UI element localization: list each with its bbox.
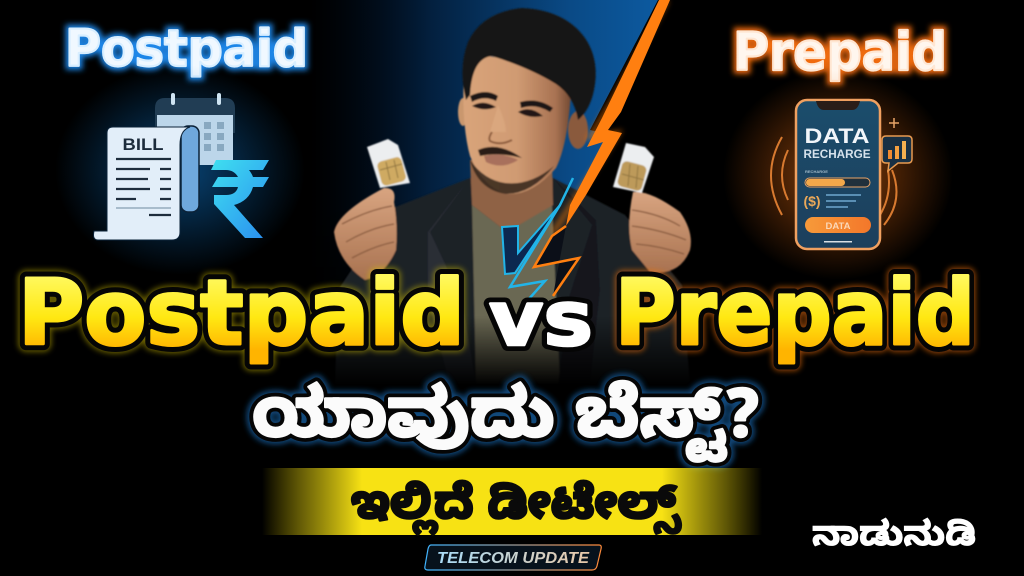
face <box>463 52 572 194</box>
Prepaid word: Prepaid <box>615 261 975 366</box>
neck <box>470 160 553 232</box>
chat bubble with bars <box>882 136 912 171</box>
band caption: ಇಲ್ಲಿದೆ ಡೀಟೇಲ್ಸ್ <box>351 480 682 543</box>
background: blue panel behind the man <box>338 0 658 216</box>
ears <box>568 111 588 149</box>
vs word: vs <box>489 274 593 363</box>
plus sign <box>889 118 899 128</box>
rupee symbol <box>211 160 269 238</box>
icon: phone with data recharge: RECHARGE <box>804 147 870 161</box>
Prepaid word: Prepaid <box>615 261 975 366</box>
notch <box>816 101 860 110</box>
postpaid heading: Postpaid <box>65 20 308 79</box>
lapels <box>428 212 468 346</box>
jacket <box>335 178 690 385</box>
calendar <box>155 93 235 165</box>
nose <box>489 132 512 143</box>
Postpaid word: Postpaid <box>18 261 465 366</box>
icon: bill, calendar and rupee <box>55 65 305 275</box>
Postpaid word: Postpaid <box>18 261 465 366</box>
hair <box>462 8 596 120</box>
blue VS lightning mark <box>502 178 573 300</box>
prepaid heading: Prepaid <box>733 22 947 83</box>
Kannada subheading: ಯಾವುದು ಬೆಸ್ಟ್? <box>252 380 760 473</box>
moustache and beard <box>478 147 522 158</box>
man holding two SIM cards <box>334 8 691 385</box>
vs word: vs <box>489 274 593 363</box>
Prepaid word: Prepaid <box>615 261 975 366</box>
orange lightning bolt <box>534 0 670 296</box>
postpaid heading: Postpaid <box>65 20 308 79</box>
SIM card right <box>613 143 654 193</box>
Postpaid word: Postpaid <box>18 261 465 366</box>
telecom update badge: TELECOM UPDATE <box>437 550 590 567</box>
bill page <box>94 127 190 240</box>
watermark: ನಾಡುನುಡಿ <box>812 517 976 564</box>
bill roll <box>181 126 199 212</box>
main headline <box>18 261 975 366</box>
bill text: BILL <box>122 135 164 154</box>
left hand <box>334 188 397 280</box>
Kannada subheading: ಯಾವುದು ಬೆಸ್ಟ್? <box>252 380 760 473</box>
yellow band <box>262 468 762 543</box>
dollar sign: ($) <box>803 193 821 209</box>
info lines <box>826 195 861 207</box>
SIM card left <box>367 139 410 188</box>
brows and eyes <box>470 92 553 112</box>
right hand <box>629 192 691 273</box>
icon: phone with data recharge <box>723 70 953 280</box>
data button: DATA <box>826 221 851 232</box>
screen text: DATA <box>804 125 870 148</box>
progress bar <box>805 178 870 187</box>
telecom update badge <box>425 545 601 570</box>
bill lines <box>116 159 171 215</box>
Kannada subheading: ಯಾವುದು ಬೆಸ್ಟ್? <box>252 380 760 473</box>
shirt <box>472 205 560 385</box>
prepaid heading: Prepaid <box>733 22 947 83</box>
data button <box>805 217 871 233</box>
signal arcs <box>771 137 896 225</box>
phone body <box>796 100 880 249</box>
icon: phone with data recharge: RECHARGE <box>805 169 828 174</box>
